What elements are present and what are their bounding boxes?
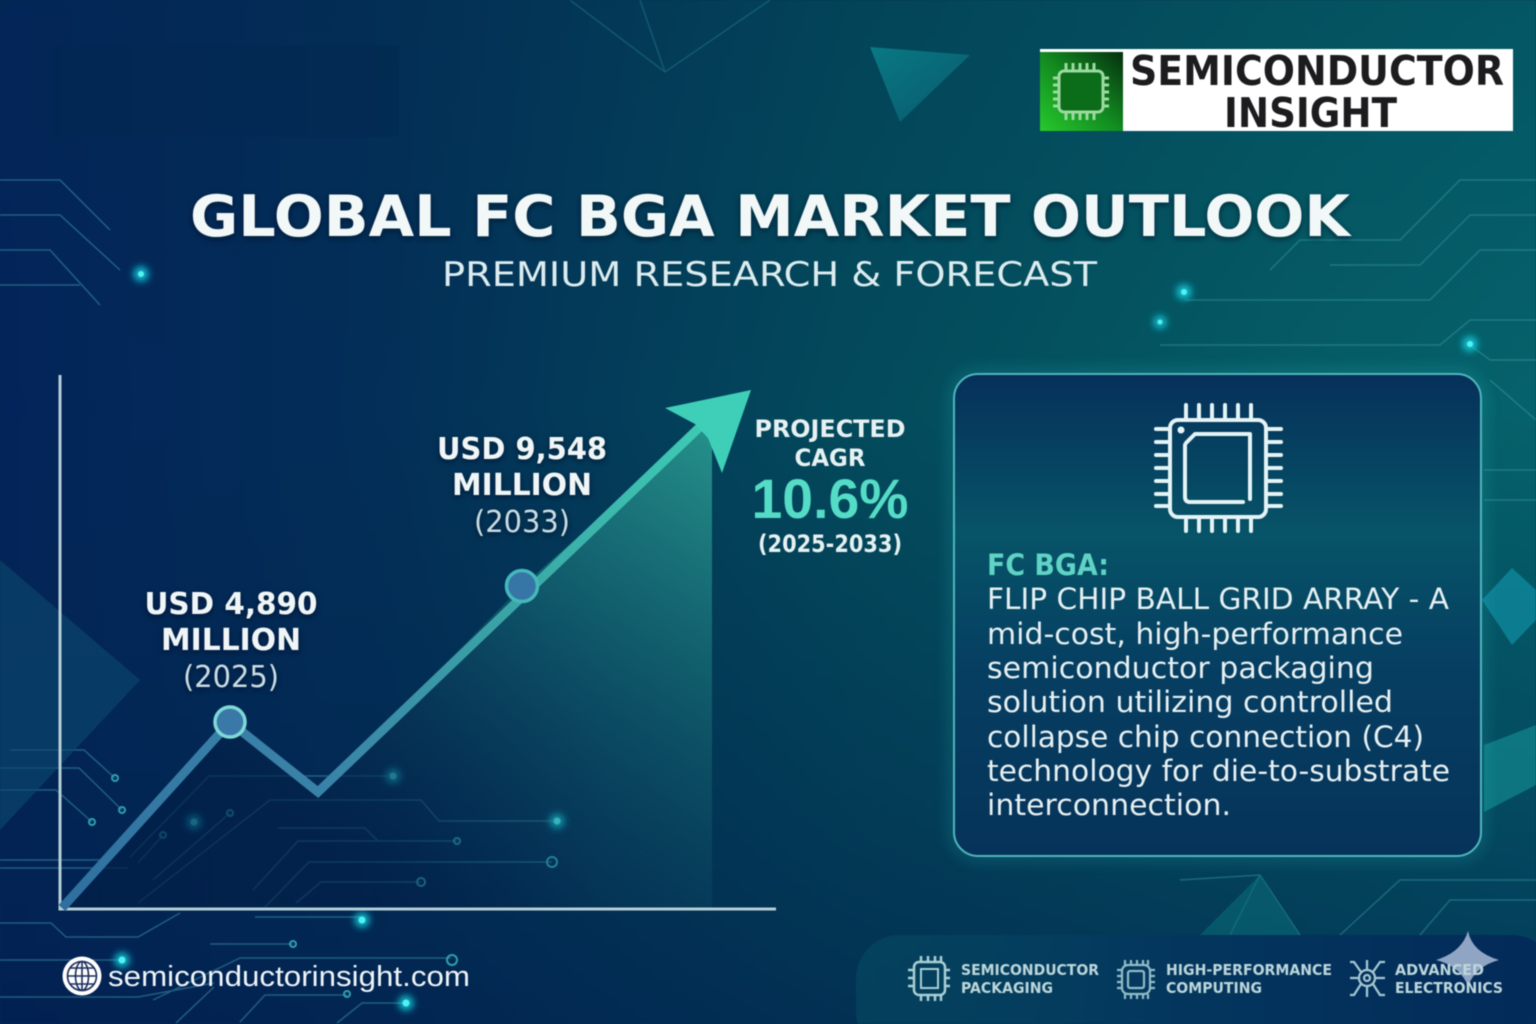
panel text: technology for die-to-substrate [987, 754, 1450, 788]
panel text: FLIP CHIP BALL GRID ARRAY - A [987, 582, 1449, 616]
label: advanced electronics: ELECTRONICS [1395, 979, 1503, 997]
arrow head [665, 390, 751, 473]
chart dark under-area [62, 420, 712, 908]
label: 2025 value [144, 587, 318, 695]
data point 2025 [215, 707, 245, 737]
label: semiconductor packaging [961, 961, 1099, 997]
website link [62, 956, 470, 996]
title: GLOBAL FC BGA MARKET OUTLOOK [190, 184, 1352, 250]
icon: semiconductor packaging [908, 956, 950, 1001]
logo text: SEMICONDUCTOR [1130, 47, 1504, 95]
panel text: semiconductor packaging [987, 651, 1374, 685]
icon: advanced electronics [1350, 960, 1385, 997]
label: advanced electronics [1395, 961, 1503, 997]
logo box [1040, 47, 1513, 137]
sparkle star [1436, 931, 1499, 986]
CAGR callout: 10.6% [752, 467, 908, 530]
CAGR callout [752, 415, 908, 558]
label: semiconductor packaging: SEMICONDUCTOR [961, 961, 1099, 979]
logo text: INSIGHT [1224, 89, 1397, 137]
label: 2025 value: USD 4,890 [144, 587, 318, 622]
label: advanced electronics: ADVANCED [1395, 961, 1484, 979]
icon: chip [1156, 405, 1281, 531]
panel text: solution utilizing controlled [987, 685, 1393, 719]
icon: globe [62, 956, 102, 996]
label: 2033 value: MILLION [452, 468, 592, 503]
label: high-performance computing [1166, 961, 1332, 997]
label: semiconductor packaging: PACKAGING [961, 979, 1053, 997]
chart area fill [62, 420, 712, 908]
CAGR callout: PROJECTED [754, 415, 906, 443]
website link: semiconductorinsight.com [108, 961, 470, 993]
panel text: collapse chip connection (C4) [987, 720, 1424, 754]
right circuit traces [570, 0, 1536, 935]
label: high-performance computing: HIGH-PERFORMANCE [1166, 961, 1332, 979]
data point 2033 [506, 570, 538, 602]
label: 2033 value: (2033) [474, 505, 570, 540]
glowing circuit nodes [89, 267, 1477, 1010]
panel text: interconnection. [987, 788, 1231, 822]
label: 2025 value: MILLION [161, 623, 301, 658]
panel text [987, 548, 1450, 822]
footer categories [908, 931, 1503, 1001]
growth line [62, 422, 705, 908]
label: high-performance computing: COMPUTING [1166, 979, 1262, 997]
circuit traces [0, 180, 557, 1023]
icon: high-performance computing [1117, 960, 1155, 999]
panel: FC BGA definition [954, 374, 1481, 856]
logo icon: green chip [1040, 52, 1123, 131]
label: 2025 value: (2025) [183, 660, 279, 695]
CAGR callout: (2025-2033) [758, 530, 902, 558]
CAGR callout: CAGR [794, 444, 866, 472]
label: 2033 value: USD 9,548 [437, 432, 607, 467]
label: 2033 value [437, 432, 607, 540]
panel text: FC BGA: [987, 548, 1109, 582]
chart axes [60, 375, 776, 909]
growth chart [60, 375, 776, 909]
subtitle: PREMIUM RESEARCH & FORECAST [442, 255, 1097, 295]
panel text: mid-cost, high-performance [987, 617, 1403, 651]
logo text [1130, 47, 1504, 137]
